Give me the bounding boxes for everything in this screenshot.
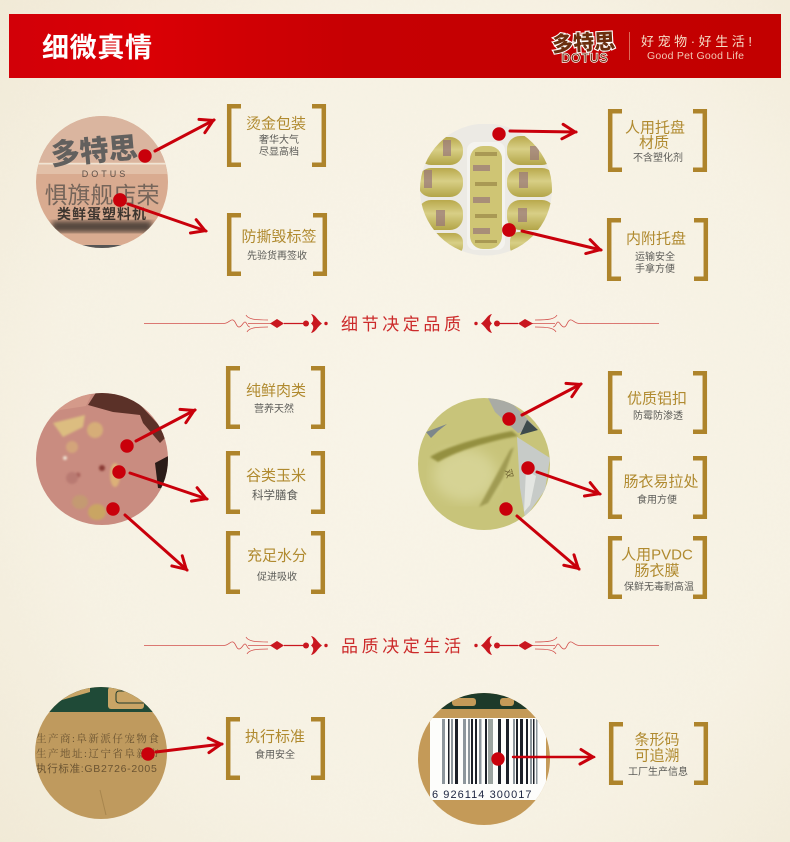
callout: grain corn: 科学膳食 [252,488,298,502]
divider: quality decides life [144,636,659,656]
detail: foil packaging photo: DOTUS [82,169,128,179]
callout: execution standard: 食用安全 [255,748,295,761]
detail: foil packaging photo: 多特思 [49,131,139,172]
detail: tray photo [418,124,555,256]
callout: easy-pull casing: 肠衣易拉处 [623,474,699,490]
callout: food-grade tray: 材质 [639,134,669,152]
callout arrows and dots: section two [106,384,600,570]
detail: meat photo [36,391,170,525]
brand slogan: Good Pet Good Life [647,50,744,62]
callout: sufficient moisture: 充足水分 [247,548,307,564]
callout: easy-pull casing: 食用方便 [637,493,677,506]
callout: PVDC casing: 肠衣膜 [634,562,680,580]
callout: traceable barcode: 条形码 [634,732,680,748]
callout: hot-stamped foil: 奢华大气 [259,133,299,146]
callout: sufficient moisture: 促进吸收 [257,570,297,583]
header banner [9,14,781,78]
callout: hot-stamped foil [229,106,324,165]
callout: food-grade tray: 不含塑化剂 [633,151,683,164]
callout: PVDC casing: 保鲜无毒耐高温 [624,580,694,593]
brand logo: 多特思 [552,30,616,57]
detail: foil packaging photo: 惧旗舰店荣 [44,182,160,208]
callout: inner tray: 运输安全 [635,250,675,263]
callout: grain corn [228,453,323,512]
callout: PVDC casing: 人用PVDC [621,546,693,564]
detail: label photo: 生产商:阜新派仔宠物食 [36,732,160,745]
callout: easy-pull casing [610,458,705,517]
callout arrows and dots: section one [113,120,601,250]
detail: barcode photo: 6 926114 300017 [432,789,533,801]
callout: hot-stamped foil: 烫金包装 [246,116,306,132]
detail: label photo: 生产地址:辽宁省阜新市 [36,747,160,760]
callout: fresh meat: 营养天然 [254,402,294,415]
callout: traceable barcode: 可追溯 [634,748,680,764]
callout: fresh meat: 纯鲜肉类 [246,382,306,400]
callout: aluminum clip [610,373,705,432]
callout: fresh meat [228,368,323,427]
callout: PVDC casing [610,538,705,597]
detail: foil packaging photo [36,116,168,248]
divider text: 细节决定品质 [341,315,461,334]
callout: anti-tear label [229,215,325,274]
brand logo: DOTUS [562,51,608,65]
callout: inner tray: 内附托盘 [626,230,686,248]
callout: execution standard [228,719,323,778]
callout: execution standard: 执行标准 [245,728,305,746]
detail: label photo [35,687,167,819]
callout: inner tray: 手拿方便 [635,262,675,275]
detail: casing photo [418,396,550,530]
callout: food-grade tray [610,111,705,170]
callout: anti-tear label: 防撕毁标签 [241,228,317,246]
callout arrows and dots: section three [141,744,594,766]
brand slogan: 好宠物·好生活! [641,34,752,49]
callout: aluminum clip: 防霉防渗透 [633,409,683,422]
callout: aluminum clip: 优质铝扣 [627,390,687,408]
detail: casing photo: 双 [503,468,515,479]
banner title: 细微真情 [42,33,152,63]
detail: label photo: 执行标准:GB2726-2005 [36,762,158,775]
callout: sufficient moisture [228,533,323,592]
callout: hot-stamped foil: 尽显高档 [259,145,299,158]
callout: anti-tear label: 先验货再签收 [247,249,307,262]
callout: traceable barcode [611,724,706,783]
callout: traceable barcode: 工厂生产信息 [628,765,688,778]
detail: barcode photo [418,693,550,825]
divider text: 品质决定生活 [341,637,461,656]
barcode bars [442,719,538,784]
detail: foil packaging photo: 类鲜蛋塑料机 [57,206,147,222]
brand slogan [641,34,752,62]
callout: food-grade tray: 人用托盘 [625,118,685,136]
callout: inner tray [609,220,706,279]
callout: grain corn: 谷类玉米 [246,468,306,484]
divider: details decide quality [144,314,659,334]
